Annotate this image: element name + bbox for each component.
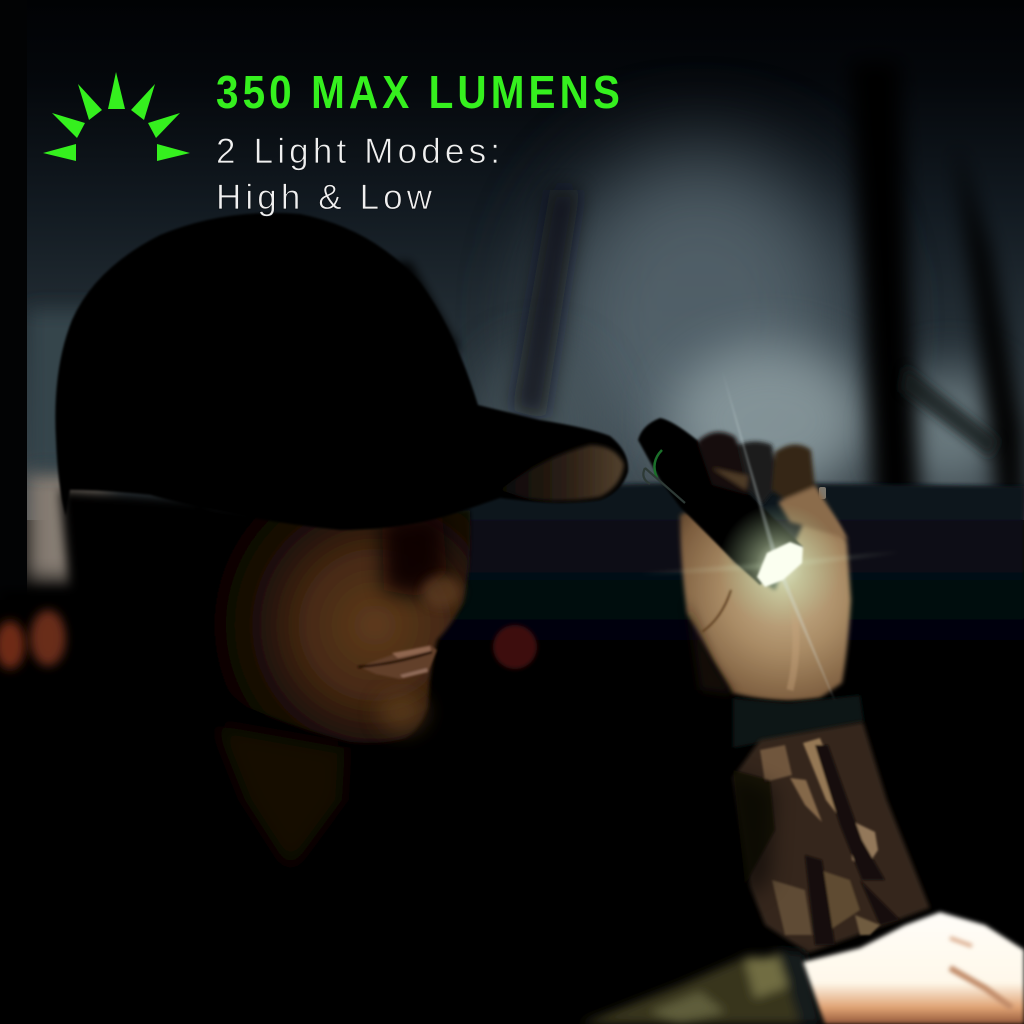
finger crease shadows	[702, 590, 796, 690]
hand holding flashlight	[680, 487, 851, 701]
lower sleeve cuff	[580, 950, 822, 1024]
subheading text: High & Low	[216, 178, 433, 217]
heading: 350 MAX LUMENS	[216, 68, 620, 119]
lens flare dot	[493, 625, 537, 669]
baseball cap silhouette	[55, 213, 628, 530]
tree trunks	[850, 60, 920, 520]
palm and wrist	[680, 495, 851, 701]
flashlight body	[638, 418, 803, 585]
dark ground	[440, 482, 1024, 1024]
icon: green light burst	[43, 72, 190, 161]
lips	[358, 645, 437, 679]
dusk horizon at far left	[27, 470, 110, 580]
shadow fade on sleeve left side	[725, 770, 775, 900]
person: face lit by flashlight	[190, 505, 470, 743]
lit lower hand	[803, 912, 1024, 1024]
person: shirt and shoulders silhouette	[0, 490, 790, 1024]
ring	[819, 487, 826, 499]
eye and nose shadow	[382, 515, 447, 597]
subheading text	[216, 132, 500, 217]
fingers wrapped over flashlight	[697, 432, 848, 540]
flashlight beam flare	[640, 370, 900, 725]
camo pattern	[733, 738, 900, 945]
sky glow patches	[550, 150, 850, 490]
subheading text: 2 Light Modes:	[216, 132, 500, 171]
camouflage sleeve	[725, 695, 930, 953]
orange lights at left	[0, 590, 90, 700]
brim underside	[500, 445, 624, 501]
lower left palm shadow	[687, 600, 735, 695]
cap patch	[330, 262, 460, 372]
